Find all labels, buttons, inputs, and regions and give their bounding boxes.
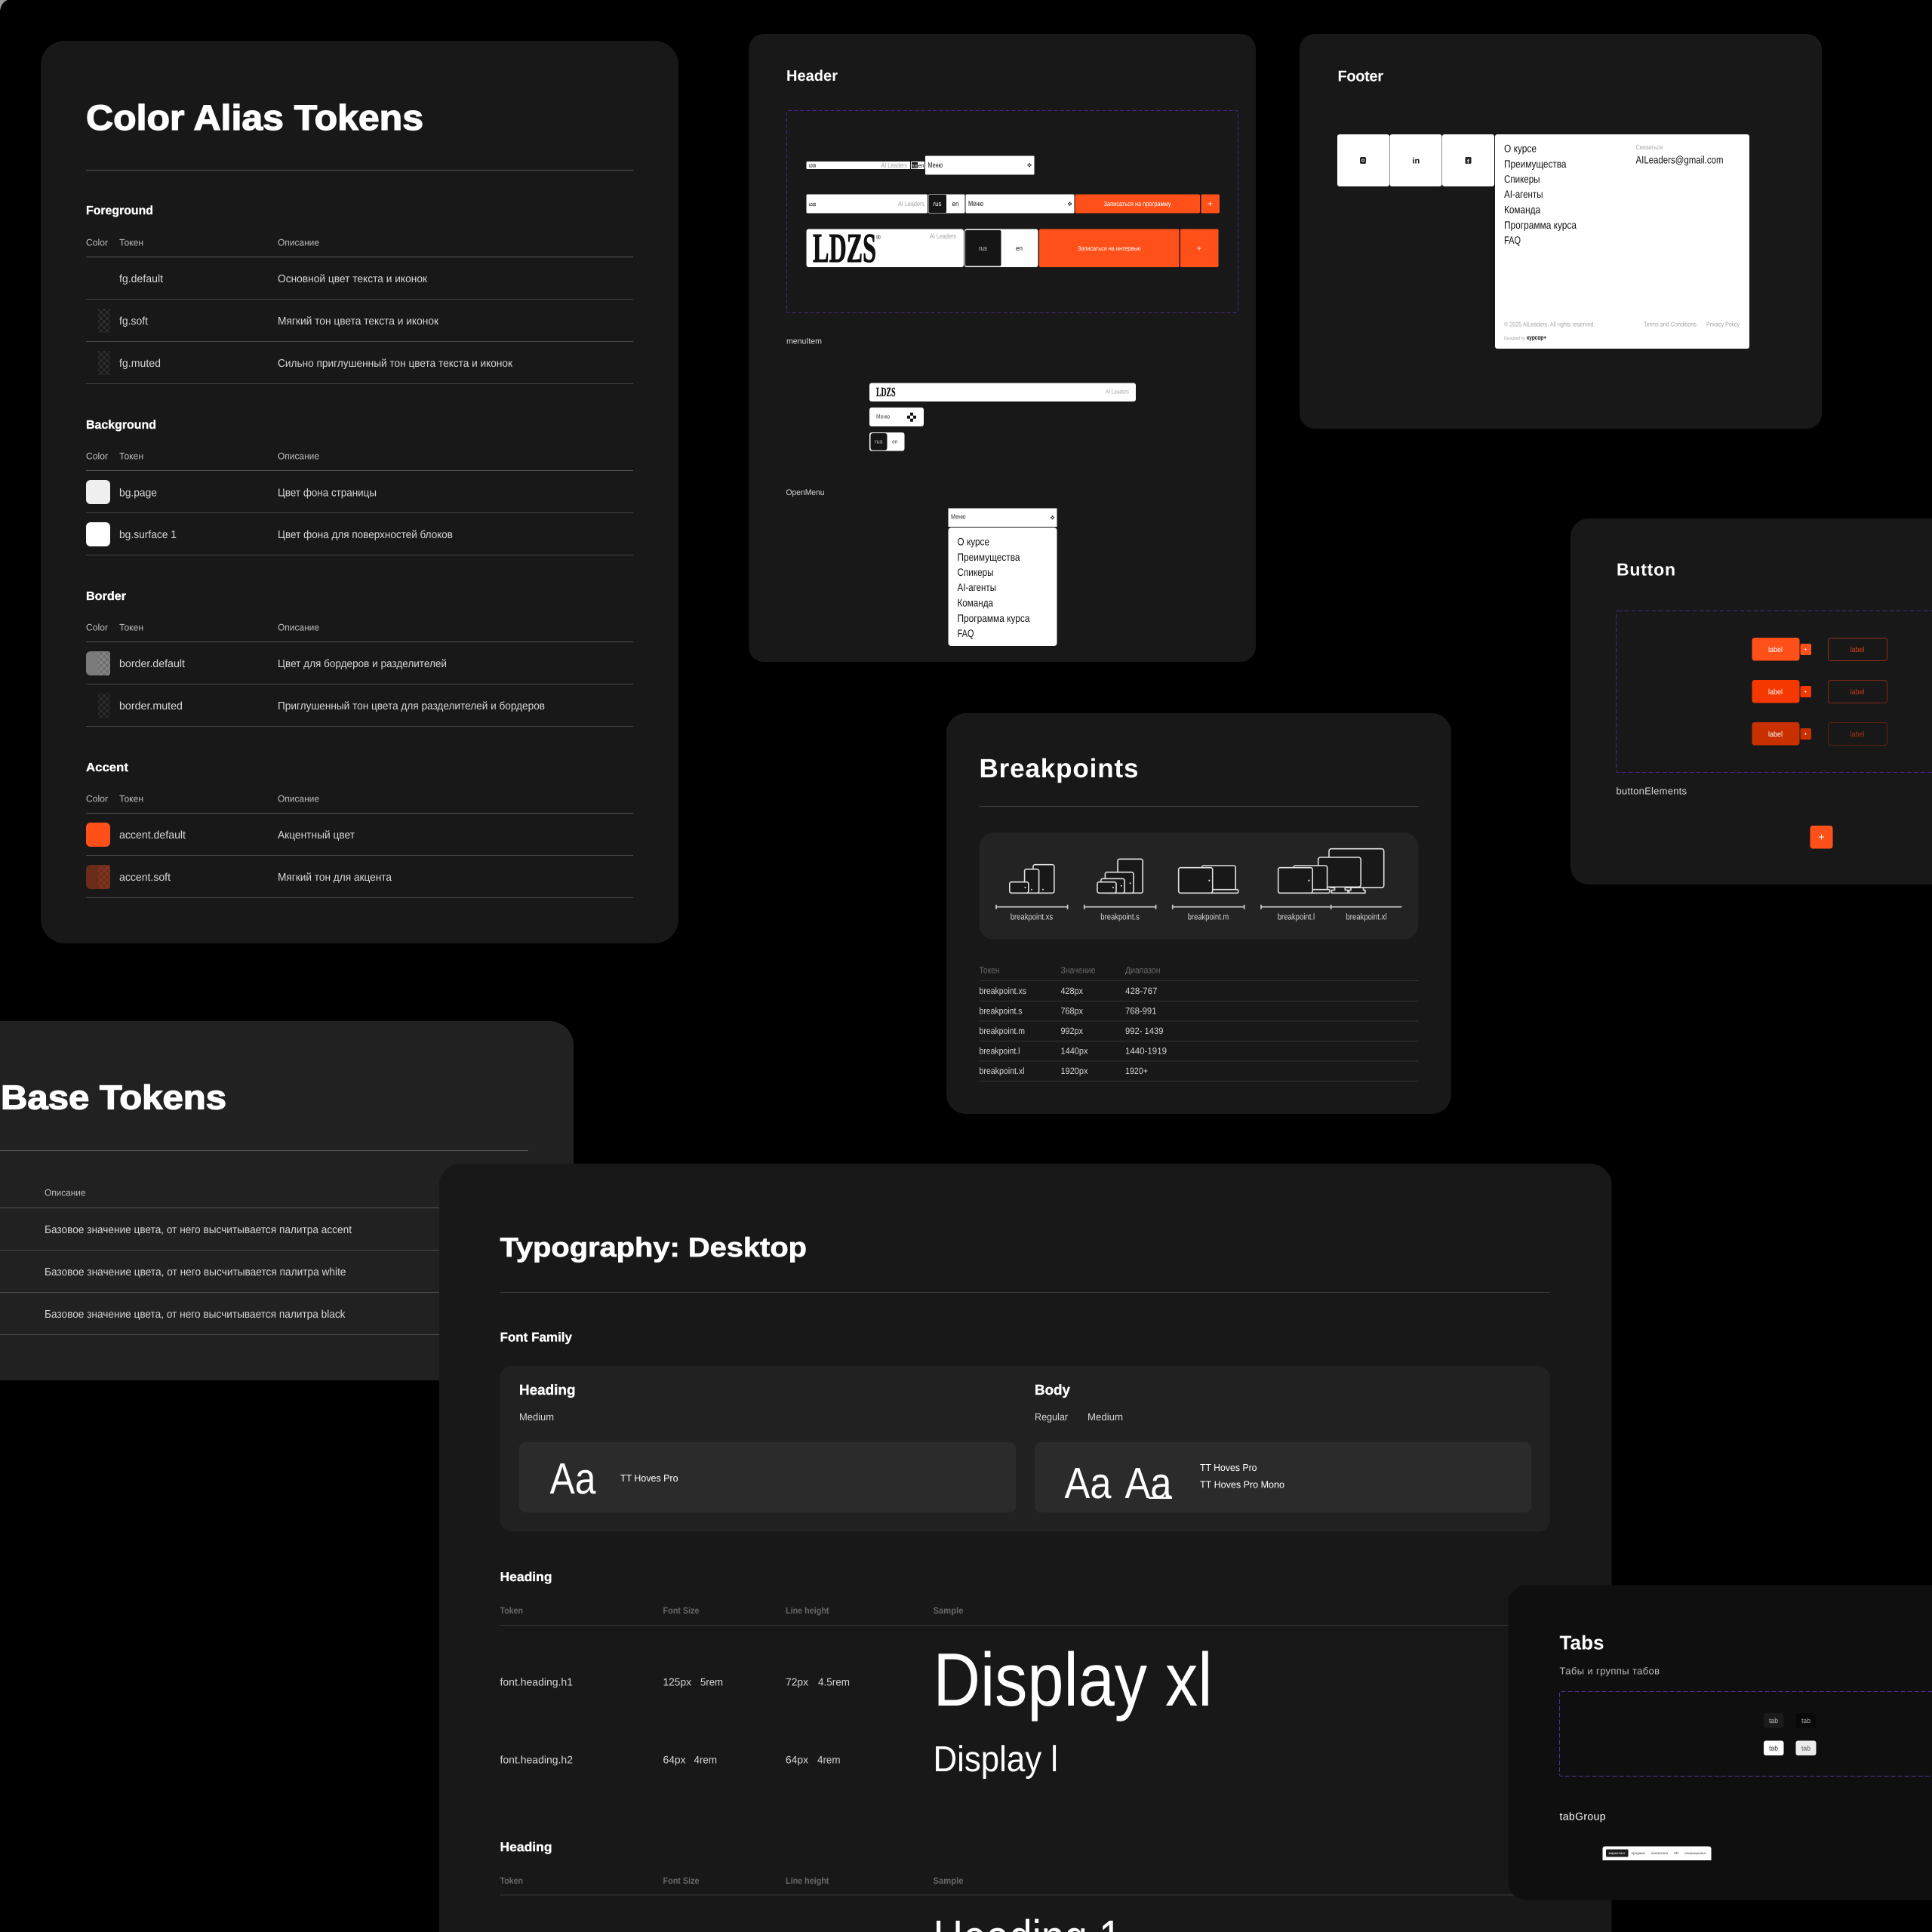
header variant: tablet: LDZS xyxy=(809,202,816,208)
component: logo bar: AI Leaders xyxy=(1106,388,1129,395)
tab states: tab xyxy=(1801,1745,1810,1752)
section: Border: border.default xyxy=(119,658,185,670)
breakpoints table: Токен xyxy=(980,964,999,975)
footer card: кypcop+ xyxy=(1527,334,1546,341)
heading: Base Tokens: Base Tokens xyxy=(1,1078,226,1117)
font family card: TT Hoves Pro Mono xyxy=(1200,1479,1284,1490)
component: open menu: AI-агенты xyxy=(957,581,996,593)
breakpoints table: breakpoint.xl xyxy=(980,1066,1025,1076)
button row: pressed xyxy=(1752,722,1887,746)
breakpoint labels: breakpoint.xl xyxy=(1346,913,1387,922)
icon: s devices xyxy=(1097,859,1143,893)
base tokens table xyxy=(0,1188,528,1335)
tab group: операционка xyxy=(1684,1851,1706,1855)
footer card: Terms and Conditions xyxy=(1644,320,1697,328)
header variant: mobile: en xyxy=(918,162,924,169)
header variant: desktop: ® xyxy=(876,234,881,241)
section: Heading display: Heading xyxy=(500,1570,552,1584)
section: Heading sizes: Line height xyxy=(786,1875,829,1886)
section: Border: Приглушенный тон цвета для разделителей и бордеров xyxy=(278,700,545,712)
component: open menu: Преимущества xyxy=(957,551,1020,563)
panel: Button xyxy=(1571,518,1932,884)
font family card: Aa xyxy=(1064,1459,1112,1508)
heading: Font Family: Font Family xyxy=(500,1330,573,1345)
section: Background xyxy=(86,419,633,555)
header variant: mobile xyxy=(806,155,1034,175)
section: Heading display: 72px xyxy=(786,1675,808,1687)
section: Heading display: font.heading.h2 xyxy=(500,1754,573,1766)
footer card xyxy=(1495,134,1749,349)
footer card: Команда xyxy=(1504,204,1540,216)
breakpoints table: Диапазон xyxy=(1125,964,1161,975)
breakpoints table: 768-991 xyxy=(1125,1005,1157,1016)
icon: l and xl devices xyxy=(1278,849,1384,893)
tab states: tab xyxy=(1769,1745,1778,1752)
section: Heading sizes xyxy=(500,1840,1550,1932)
breakpoints table: Значение xyxy=(1061,964,1096,975)
section: Background: Background xyxy=(86,419,156,432)
header variant: tablet: en xyxy=(952,200,958,208)
breakpoints table: 1440-1919 xyxy=(1125,1046,1167,1057)
heading: Footer: Footer xyxy=(1337,68,1383,85)
component: open menu: О курсе xyxy=(957,536,989,548)
font family card: Medium xyxy=(1088,1411,1123,1423)
button row: hover xyxy=(1752,680,1887,703)
section: Foreground: Основной цвет текста и иконок xyxy=(278,273,428,285)
font family card: Aa xyxy=(1124,1459,1172,1508)
section: Border: Токен xyxy=(119,622,143,632)
tab group: аналитика xyxy=(1651,1851,1668,1855)
social: facebook: f xyxy=(1467,158,1469,165)
section: Border: Color xyxy=(86,622,108,632)
footer card: AI-агенты xyxy=(1504,188,1543,200)
panel: Breakpoints xyxy=(946,713,1451,1114)
tab group xyxy=(1603,1846,1712,1860)
label: OpenMenu: OpenMenu xyxy=(786,488,824,497)
footer card: Privacy Policy xyxy=(1706,320,1740,328)
breakpoint labels: breakpoint.xs xyxy=(1011,913,1053,922)
section: Accent: Акцентный цвет xyxy=(278,829,355,841)
section: Heading display: Font Size xyxy=(663,1605,700,1616)
section: Background: Цвет фона страницы xyxy=(278,488,377,500)
section: Foreground: Сильно приглушенный тон цвета текста и иконок xyxy=(278,358,513,370)
section: Heading display xyxy=(500,1570,1550,1780)
icon button: plus xyxy=(1810,826,1832,848)
breakpoints table: 1440px xyxy=(1061,1046,1088,1057)
header variant: desktop: en xyxy=(1016,245,1023,252)
button row: hover: label xyxy=(1850,688,1864,697)
breakpoints table: breakpoint.xs xyxy=(980,986,1026,996)
subtitle: Табы и группы табов xyxy=(1559,1665,1660,1677)
footer card: FAQ xyxy=(1504,234,1521,246)
social: instagram xyxy=(1337,134,1389,186)
social: linkedin xyxy=(1390,134,1441,186)
component: open menu: Команда xyxy=(957,596,993,608)
device diagram xyxy=(980,832,1419,940)
button row: hover: label xyxy=(1768,688,1783,697)
section: Background: bg.page xyxy=(119,488,157,500)
breakpoints table: 992- 1439 xyxy=(1125,1026,1164,1036)
section: Accent: Color xyxy=(86,794,108,804)
section: Foreground: Color xyxy=(86,237,108,248)
section: Accent xyxy=(86,761,633,898)
section: Foreground: fg.muted xyxy=(119,358,161,370)
header variant: tablet xyxy=(806,195,1220,213)
section: Accent: accent.default xyxy=(119,829,186,841)
font family card: Body xyxy=(1035,1383,1070,1398)
section: Border: Цвет для бордеров и разделителей xyxy=(278,658,447,670)
icon: m devices xyxy=(1179,866,1238,893)
heading: Button: Button xyxy=(1617,560,1675,580)
section: Foreground: Описание xyxy=(278,237,319,248)
button row: pressed: label xyxy=(1768,731,1783,739)
breakpoints table: breakpoint.l xyxy=(980,1046,1020,1057)
section: Heading display: Sample xyxy=(933,1605,964,1616)
section: Border: Описание xyxy=(278,622,319,632)
font family card: Heading xyxy=(519,1383,575,1398)
tab states xyxy=(1764,1713,1816,1755)
section: Heading display: 64px xyxy=(786,1754,808,1766)
component: menu button: Меню xyxy=(876,414,890,420)
social: facebook xyxy=(1442,134,1494,186)
base tokens table: Базовое значение цвета, от него высчитывается палитра black xyxy=(45,1309,346,1321)
panel: Tabs xyxy=(1508,1585,1932,1900)
header variant: mobile: AI Leaders xyxy=(881,162,907,169)
panel: Footer xyxy=(1300,34,1822,429)
component: open menu xyxy=(948,509,1057,646)
component: open menu: Меню xyxy=(951,513,966,521)
font family card: Medium xyxy=(519,1411,554,1423)
section: Heading sizes: Token xyxy=(500,1875,523,1886)
base tokens table: Базовое значение цвета, от него высчитывается палитра accent xyxy=(45,1224,352,1236)
section: Foreground xyxy=(86,205,633,384)
button row: default: label xyxy=(1850,646,1864,654)
section: Accent: Мягкий тон для акцента xyxy=(278,872,392,884)
section: Background: Описание xyxy=(278,451,319,462)
font family card: TT Hoves Pro xyxy=(1200,1462,1257,1473)
component: open menu: FAQ xyxy=(957,627,974,639)
breakpoints table: 428-767 xyxy=(1125,986,1158,996)
breakpoint labels: breakpoint.l xyxy=(1278,913,1315,922)
panel: Header xyxy=(749,34,1256,662)
section: Accent: Токен xyxy=(119,794,143,804)
section: Border xyxy=(86,590,633,727)
section: Heading display: Display l xyxy=(933,1740,1058,1780)
header variant: desktop: AI Leaders xyxy=(930,232,956,241)
button row: pressed: label xyxy=(1850,731,1864,739)
panel: Base Tokens xyxy=(0,1021,574,1380)
breakpoints table: 428px xyxy=(1061,986,1083,996)
section: Foreground: fg.default xyxy=(119,273,163,285)
section: Heading display: Display xl xyxy=(933,1638,1212,1722)
header variant: tablet: AI Leaders xyxy=(898,200,924,208)
section: Background: Цвет фона для поверхностей блоков xyxy=(278,529,453,541)
heading: Color Alias Tokens: Color Alias Tokens xyxy=(86,97,423,137)
section: Heading display: font.heading.h1 xyxy=(500,1675,573,1687)
tab group: продажи xyxy=(1632,1851,1645,1855)
header variant: desktop: rus xyxy=(979,245,987,252)
section: Background: Токен xyxy=(119,451,143,462)
section: Background: bg.surface 1 xyxy=(119,529,177,541)
breakpoints table: 1920px xyxy=(1061,1066,1088,1076)
heading: Typography Desktop: Typography: Desktop xyxy=(500,1232,807,1263)
footer card: AILeaders@gmail.com xyxy=(1636,154,1724,166)
logo: LDZS: LDZS xyxy=(813,225,876,271)
component: open menu: Программа курса xyxy=(957,612,1030,624)
label: menuItem: menuItem xyxy=(786,337,822,346)
range rulers xyxy=(996,905,1401,909)
breakpoint labels: breakpoint.m xyxy=(1188,913,1229,922)
heading: Header: Header xyxy=(786,68,838,85)
section: Accent: Accent xyxy=(86,761,129,774)
component: language switch: en xyxy=(892,438,898,445)
button row: default xyxy=(1752,638,1887,661)
panel: Color Alias Tokens xyxy=(41,41,678,943)
header variant: desktop xyxy=(806,225,1218,271)
section: Foreground: Foreground xyxy=(86,205,153,217)
font family card: TT Hoves Pro xyxy=(620,1472,678,1484)
header variant: tablet: Меню xyxy=(968,200,983,208)
section: Heading display: 4rem xyxy=(694,1754,717,1766)
section: Foreground: Мягкий тон цвета текста и иконок xyxy=(278,315,439,328)
tab states: tab xyxy=(1801,1717,1810,1724)
section: Heading display: Token xyxy=(500,1605,523,1616)
section: Foreground: Токен xyxy=(119,237,143,248)
breakpoints table: 992px xyxy=(1061,1026,1083,1036)
label: tabGroup: tabGroup xyxy=(1559,1810,1606,1822)
font family card xyxy=(500,1366,1550,1532)
section: Border: border.muted xyxy=(119,700,183,712)
section: Heading display: 5rem xyxy=(700,1675,723,1687)
base tokens table: Описание xyxy=(45,1188,86,1198)
breakpoints table: breakpoint.s xyxy=(980,1005,1022,1016)
font family card: Regular xyxy=(1035,1411,1068,1423)
font family card: Aa xyxy=(549,1454,596,1503)
section: Accent: accent.soft xyxy=(119,872,171,884)
footer card: Спикеры xyxy=(1504,173,1540,185)
header variant: mobile: Меню xyxy=(928,162,943,170)
breakpoints table: breakpoint.m xyxy=(980,1026,1025,1036)
component: language switch xyxy=(869,432,904,451)
breakpoint labels: breakpoint.s xyxy=(1100,913,1140,922)
breakpoints table: 1920+ xyxy=(1125,1066,1148,1076)
label: buttonElements: buttonElements xyxy=(1617,785,1687,797)
footer card: Designed by xyxy=(1504,336,1525,341)
header variant: desktop: Записаться на интервью xyxy=(1078,245,1141,252)
breakpoints table xyxy=(980,964,1419,1081)
section: Heading display: 4rem xyxy=(817,1754,841,1766)
section: Border: Border xyxy=(86,590,126,603)
header variant: tablet: rus xyxy=(933,200,942,208)
section: Heading display: 4.5rem xyxy=(818,1675,850,1687)
footer card: © 2025 AlLeaders. All rights reserved. xyxy=(1504,320,1595,328)
heading: Tabs: Tabs xyxy=(1559,1632,1604,1654)
base tokens table: Базовое значение цвета, от него высчитывается палитра white xyxy=(45,1266,346,1278)
tab states: tab xyxy=(1769,1717,1778,1724)
breakpoints table: 768px xyxy=(1061,1005,1083,1016)
component: menu button xyxy=(869,408,924,426)
section: Accent: Описание xyxy=(278,794,319,804)
section: Heading display: 125px xyxy=(663,1675,691,1687)
component: language switch: rus xyxy=(875,438,883,445)
social: linkedin: in xyxy=(1413,157,1420,166)
footer card: Программа курса xyxy=(1504,219,1577,231)
tab group: маркетинг xyxy=(1609,1851,1626,1855)
component: logo bar: LDZS xyxy=(876,385,895,399)
button row: default: label xyxy=(1768,646,1783,654)
section: Background: Color xyxy=(86,451,108,462)
footer card: О курсе xyxy=(1504,142,1537,154)
section: Heading sizes: Font Size xyxy=(663,1875,700,1886)
heading: Breakpoints: Breakpoints xyxy=(980,754,1138,783)
component: logo bar xyxy=(869,383,1136,401)
icon: xs devices xyxy=(1010,865,1054,893)
tab group: HR xyxy=(1674,1851,1679,1855)
section: Heading sizes: Heading xyxy=(500,1840,552,1854)
section: Heading sizes: Sample xyxy=(933,1875,964,1886)
header variant: mobile: LDZS xyxy=(809,163,816,169)
component: open menu: Спикеры xyxy=(957,566,993,578)
panel: Typography Desktop xyxy=(439,1164,1612,1932)
section: Foreground: fg.soft xyxy=(119,315,148,328)
footer card: Связаться xyxy=(1636,143,1663,151)
section: Heading display: 64px xyxy=(663,1754,685,1766)
section: Heading display: Line height xyxy=(786,1605,829,1616)
header variant: mobile: rus xyxy=(912,162,918,169)
breakpoint labels xyxy=(1011,913,1387,922)
header variant: tablet: Записаться на программу xyxy=(1103,200,1171,208)
footer card: Преимущества xyxy=(1504,158,1567,170)
